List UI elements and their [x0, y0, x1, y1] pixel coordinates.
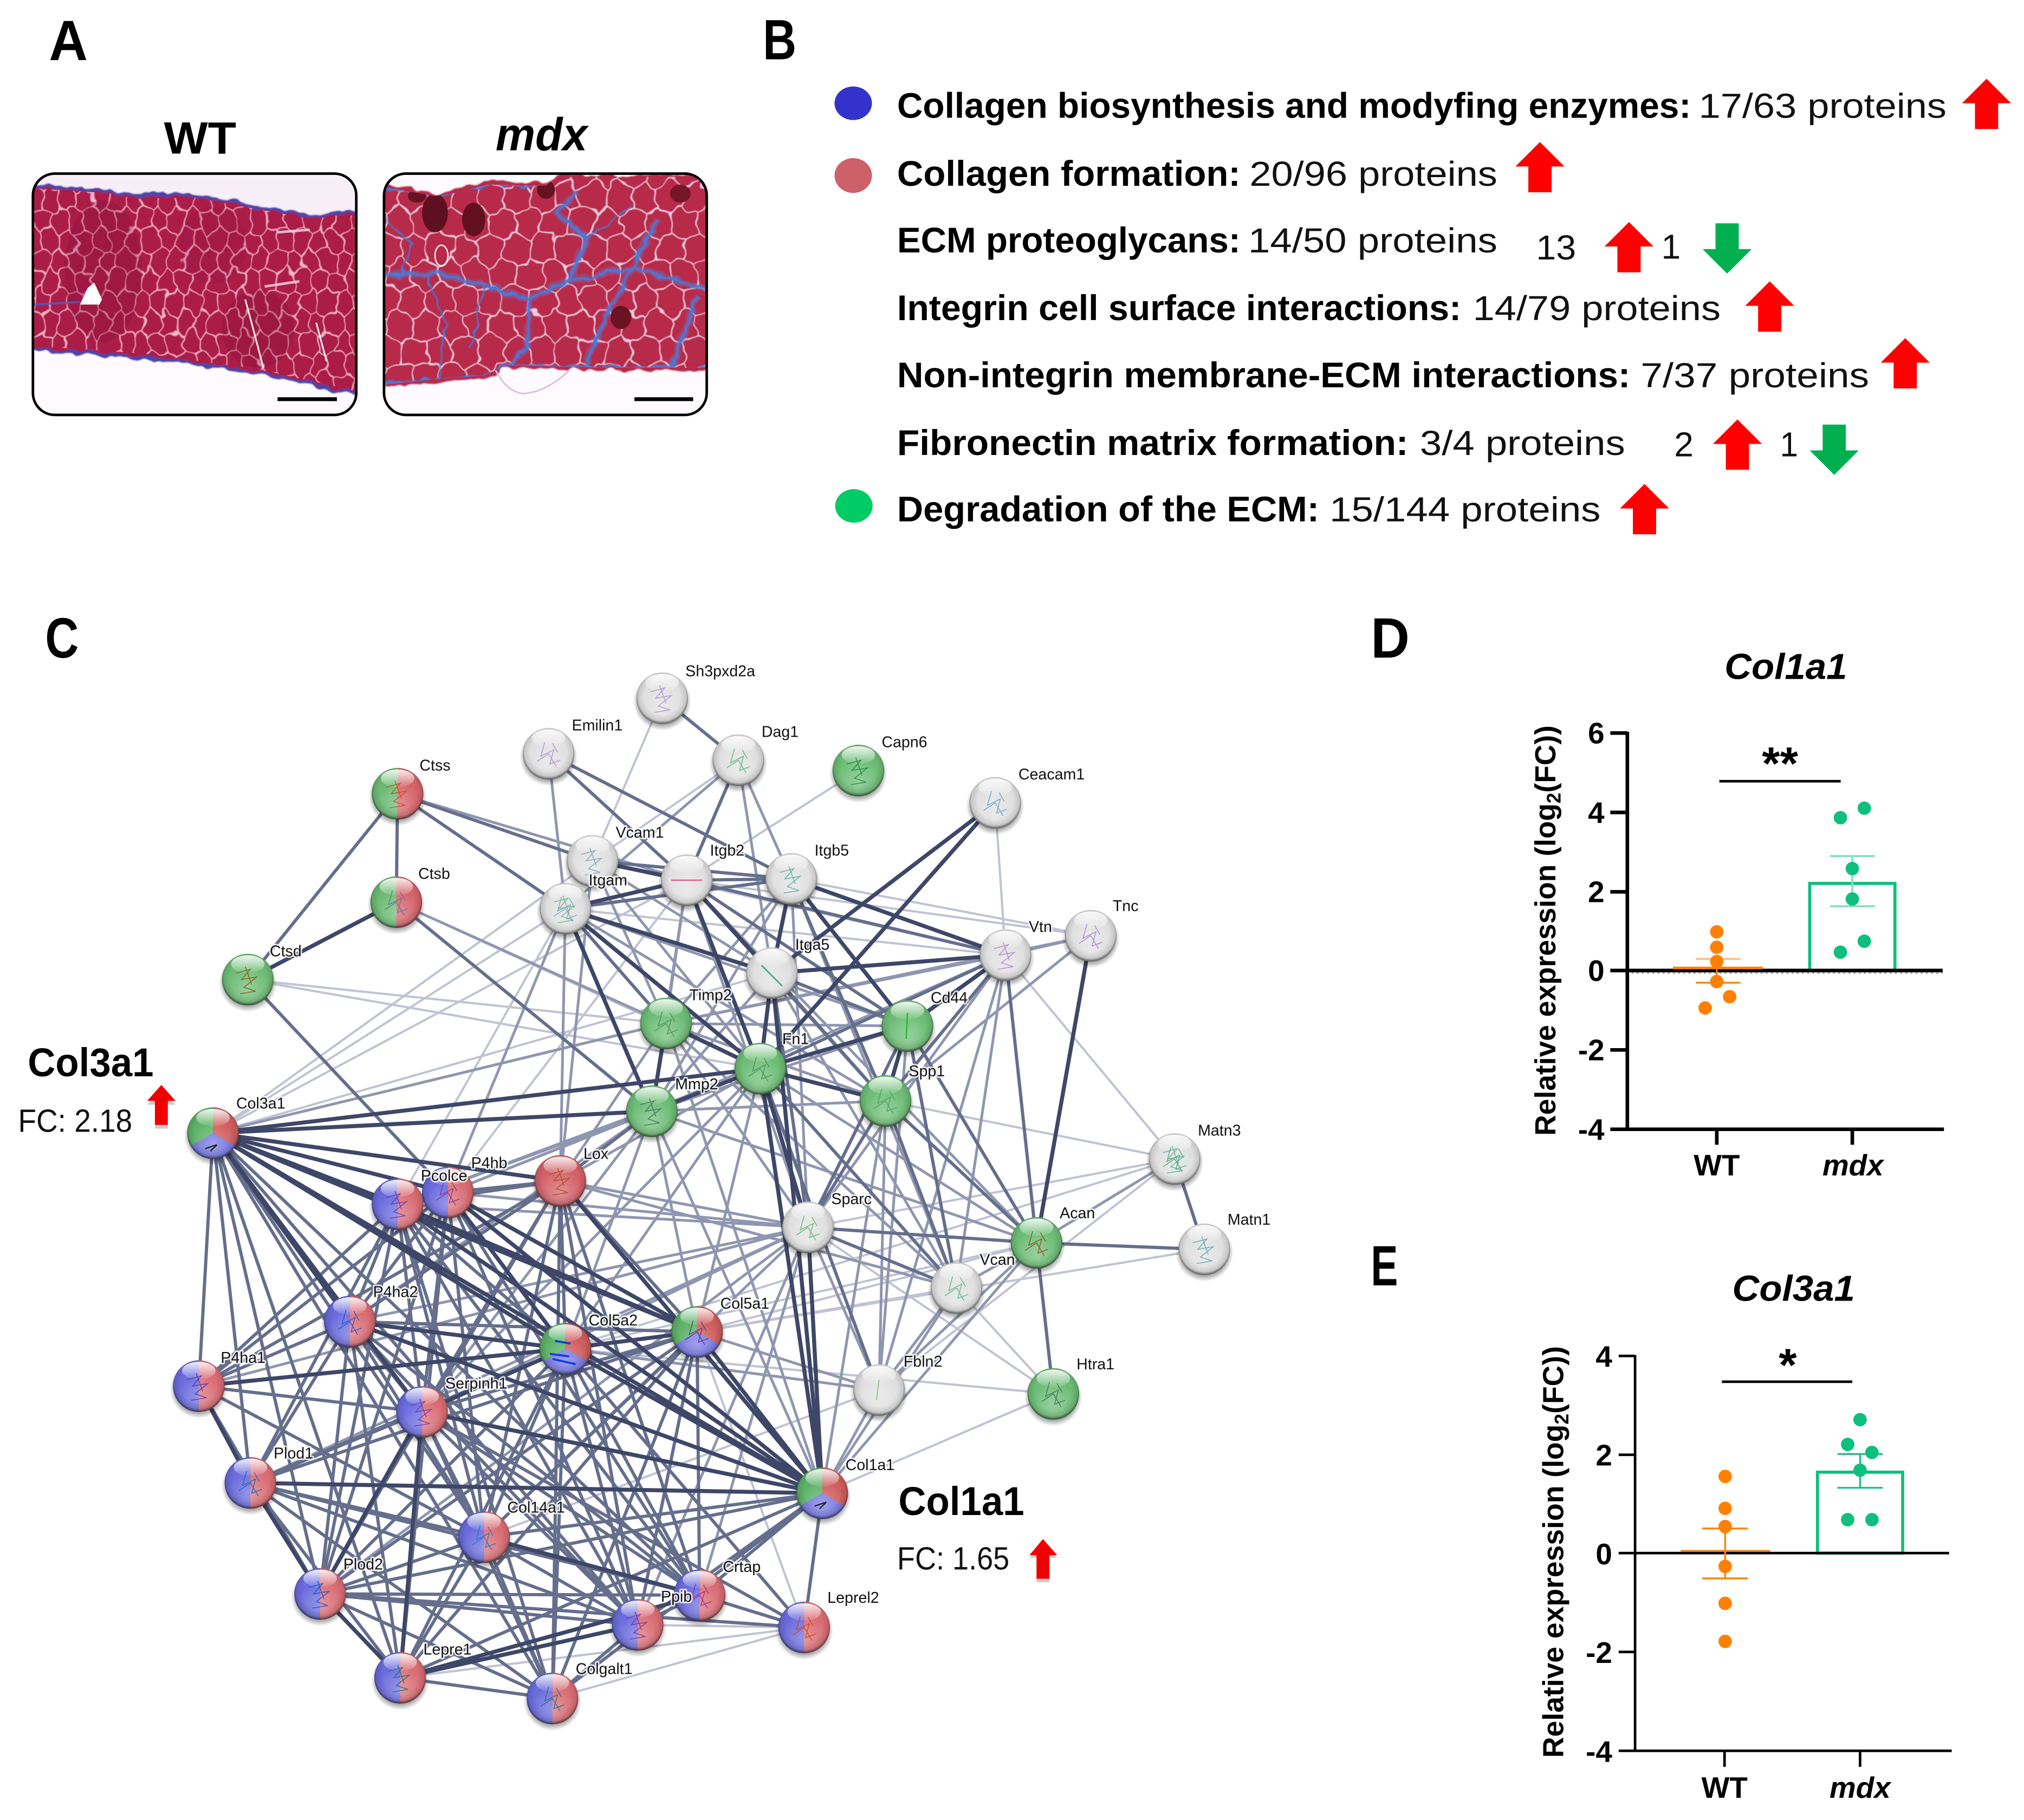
- row: non-integrin interactions: 7/37 proteins: [1640, 356, 1869, 395]
- y-axis title: 2: [1551, 1414, 1573, 1425]
- node Sparc: [779, 1191, 872, 1259]
- mdx bar: [1818, 1472, 1903, 1553]
- node Timp2: Timp2: [689, 987, 732, 1004]
- row: ECM proteoglycans: ECM proteoglycans:: [897, 220, 1241, 260]
- node P4hb: [368, 1154, 507, 1237]
- significance bar: [1722, 1381, 1852, 1382]
- row: collagen biosynthesis: [897, 79, 2011, 129]
- mdx error bars: [1830, 856, 1875, 906]
- node Capn6: Capn6: [881, 734, 927, 751]
- node P4ha2: P4ha2: [373, 1284, 418, 1301]
- frame: mdx micrograph: [384, 173, 707, 415]
- micrograph: WT muscle section: [34, 175, 355, 396]
- row: ECM degradation: Degradation of the ECM:: [897, 490, 1319, 529]
- row: collagen formation: Collagen formation:: [897, 154, 1241, 193]
- WT mean and error: [1681, 1529, 1770, 1578]
- chart title: Col1a1: [1724, 647, 1847, 687]
- node Col14a1: Col14a1: [507, 1499, 565, 1516]
- x labels: [1694, 1148, 1885, 1182]
- node Emilin1: Emilin1: [572, 717, 622, 734]
- row: ECM degradation: 15/144 proteins: [1329, 490, 1600, 529]
- y tick labels: 2: [1588, 875, 1605, 908]
- legend dot: blue: [834, 87, 872, 120]
- node Crtap: Crtap: [723, 1558, 761, 1576]
- node Tnc: [1062, 898, 1138, 968]
- node Mmp2: Mmp2: [675, 1076, 718, 1093]
- node Vtn: [976, 918, 1052, 987]
- panel D: Col1a1 bar chart: [1371, 607, 1944, 1182]
- node Dag1: [709, 723, 799, 792]
- node Leprel2: [775, 1589, 879, 1660]
- x labels: mdx: [1822, 1148, 1885, 1182]
- panel letter D: D: [1371, 607, 1410, 670]
- row: fibronectin matrix: [897, 419, 1859, 475]
- node Pcolce: [419, 1167, 477, 1225]
- y tick labels: [1586, 1340, 1612, 1768]
- node Sh3pxd2a: [633, 663, 755, 731]
- panel letter E: E: [1371, 1234, 1398, 1298]
- y tick labels: -4: [1586, 1734, 1612, 1768]
- callout Col3a1: FC: 2.18: [18, 1103, 132, 1139]
- node Lox: [531, 1146, 608, 1213]
- callout Col1a1: FC: 1.65: [897, 1540, 1009, 1576]
- WT points: [1698, 925, 1736, 1015]
- y tick labels: 0: [1588, 954, 1605, 987]
- panel A: histology: [13, 9, 723, 415]
- row: non-integrin interactions: [897, 338, 1930, 395]
- panel letter C: C: [45, 607, 79, 670]
- row: integrin interactions: [897, 281, 1794, 332]
- node Col14a1: [455, 1499, 565, 1569]
- node Ppib: [608, 1588, 692, 1657]
- node Matn3: [1146, 1122, 1241, 1191]
- node Cd44: Cd44: [931, 989, 968, 1006]
- node Dag1: Dag1: [762, 723, 799, 740]
- node Vtn: Vtn: [1029, 918, 1052, 935]
- node Itgb5: [762, 842, 849, 911]
- node Itga5: [743, 937, 829, 1005]
- node Vcan: Vcan: [979, 1251, 1015, 1269]
- callout Col3a1: Col3a1: [28, 1040, 154, 1085]
- node Htra1: [1024, 1356, 1114, 1426]
- row: fibronectin matrix: Fibronectin matrix formation:: [897, 423, 1408, 463]
- node Matn1: Matn1: [1228, 1211, 1270, 1228]
- mdx bar: [1809, 883, 1895, 971]
- row: collagen biosynthesis: 17/63 proteins: [1699, 87, 1947, 126]
- node Plod1: [222, 1445, 313, 1515]
- node Emilin1: [520, 717, 622, 786]
- node Plod2: Plod2: [343, 1556, 383, 1573]
- node Ctsb: [367, 866, 450, 934]
- network edges: [199, 698, 1204, 1699]
- chart title: Col3a1: [1733, 1269, 1855, 1309]
- x labels: WT: [1694, 1148, 1740, 1182]
- axes and ticks: [1610, 732, 1944, 1145]
- node Ctsd: Ctsd: [270, 943, 302, 960]
- panel B: enriched pathway list: [763, 9, 2011, 534]
- node Serpinh1: Serpinh1: [445, 1375, 507, 1393]
- label WT: WT: [164, 113, 236, 164]
- y tick labels: [1578, 716, 1605, 1146]
- dotted baseline: [1626, 973, 1943, 974]
- node Ctss: Ctss: [419, 757, 451, 774]
- node Acan: Acan: [1060, 1205, 1095, 1222]
- node Crtap: [671, 1558, 761, 1628]
- y tick labels: 4: [1588, 796, 1605, 829]
- node Pcolce: Pcolce: [421, 1167, 468, 1185]
- WT points: [1718, 1470, 1732, 1648]
- node Matn1: [1175, 1211, 1270, 1282]
- node P4ha1: P4ha1: [220, 1349, 265, 1367]
- mdx points: [1841, 1413, 1879, 1526]
- y tick labels: -2: [1586, 1636, 1612, 1669]
- node Col5a1: [668, 1295, 769, 1364]
- panel C: protein interaction network: [18, 607, 1270, 1731]
- x labels: WT: [1702, 1771, 1748, 1804]
- y tick labels: 6: [1588, 716, 1605, 750]
- node Fbln2: [850, 1353, 942, 1422]
- node Timp2: [637, 987, 732, 1056]
- node Serpinh1: [393, 1375, 507, 1444]
- node P4hb: P4hb: [471, 1154, 507, 1172]
- node Plod1: Plod1: [274, 1445, 313, 1462]
- significance star: *: [1779, 1339, 1797, 1391]
- node Itgam: Itgam: [588, 872, 627, 889]
- callout Col1a1: Col1a1: [898, 1479, 1024, 1524]
- node Lepre1: Lepre1: [424, 1641, 472, 1659]
- node Col3a1: [184, 1095, 286, 1166]
- scale bar mdx: [634, 397, 693, 401]
- row: fibronectin matrix: 3/4 proteins: [1420, 424, 1625, 463]
- node Itgb2: [658, 842, 744, 913]
- node Acan: [1008, 1205, 1095, 1275]
- callout Col1a1: [897, 1479, 1057, 1582]
- node Col3a1: Col3a1: [236, 1095, 286, 1113]
- row: fibronectin matrix: 1: [1780, 425, 1798, 464]
- node Lepre1: [371, 1641, 472, 1710]
- row: ECM proteoglycans: 1: [1661, 227, 1681, 266]
- row: fibronectin matrix: 2: [1674, 425, 1694, 464]
- significance bar: [1720, 781, 1841, 782]
- y tick labels: -2: [1578, 1033, 1605, 1067]
- row: collagen formation: [897, 142, 1565, 193]
- node P4ha2: [321, 1284, 418, 1354]
- node Capn6: [829, 734, 927, 803]
- node Fbln2: Fbln2: [904, 1353, 942, 1370]
- node Ctss: [368, 757, 451, 826]
- node Ctsb: Ctsb: [418, 866, 450, 883]
- row: collagen formation: 20/96 proteins: [1249, 154, 1497, 193]
- panel E: Col3a1 bar chart: [1371, 1234, 1952, 1804]
- callout Col3a1: [18, 1040, 176, 1139]
- node Itga5: Itga5: [795, 937, 829, 954]
- panel letter A: A: [49, 9, 88, 73]
- row: integrin interactions: 14/79 proteins: [1473, 289, 1721, 328]
- x labels: mdx: [1830, 1771, 1892, 1804]
- node Cd44: [878, 989, 968, 1058]
- node Ceacam1: [966, 766, 1085, 835]
- node Plod2: [291, 1556, 383, 1626]
- node Mmp2: [623, 1076, 718, 1143]
- node Spp1: [857, 1063, 945, 1133]
- y-axis title: 2: [1543, 792, 1565, 803]
- node Itgam: [536, 872, 627, 941]
- x labels: [1702, 1771, 1892, 1804]
- node Vcam1: Vcam1: [616, 824, 664, 841]
- mdx error bars: [1838, 1454, 1883, 1488]
- node Sh3pxd2a: Sh3pxd2a: [685, 663, 755, 680]
- node P4ha1: [170, 1349, 265, 1419]
- axes and ticks: [1619, 1355, 1952, 1767]
- node Matn3: Matn3: [1198, 1122, 1241, 1140]
- node Col5a1: Col5a1: [721, 1295, 769, 1312]
- node Fn1: Fn1: [782, 1031, 809, 1048]
- node Htra1: Htra1: [1076, 1356, 1114, 1373]
- node Colgalt1: [523, 1660, 633, 1731]
- node Vcam1: [563, 824, 664, 893]
- row: ECM proteoglycans: 14/50 proteins: [1248, 221, 1497, 260]
- panel letter B: B: [763, 9, 796, 72]
- scale bar WT: [277, 397, 337, 401]
- y-axis title: (FC)): [1537, 1346, 1569, 1414]
- node Fn1: [731, 1031, 809, 1101]
- row: ECM proteoglycans: [897, 220, 1751, 274]
- significance stars: **: [1762, 738, 1799, 790]
- node Ceacam1: Ceacam1: [1019, 766, 1085, 783]
- node Col1a1: [793, 1457, 894, 1525]
- node Itgb5: Itgb5: [814, 842, 849, 860]
- mdx points: [1834, 802, 1871, 959]
- node Col5a2: [536, 1312, 638, 1381]
- y-axis title: Relative expression (log: [1537, 1424, 1569, 1758]
- node Tnc: Tnc: [1113, 898, 1138, 915]
- legend dot: green: [835, 489, 873, 523]
- node Col1a1: Col1a1: [846, 1457, 894, 1474]
- node Col5a2: Col5a2: [588, 1312, 638, 1329]
- legend dot: red: [834, 158, 872, 193]
- node Itgb2: Itgb2: [710, 842, 744, 860]
- network nodes: [170, 663, 1270, 1731]
- node Ctsd: [219, 943, 302, 1012]
- y tick labels: 2: [1595, 1438, 1612, 1472]
- node Sparc: Sparc: [831, 1191, 872, 1208]
- row: non-integrin interactions: Non-integrin membrane-ECM interactions:: [897, 355, 1630, 395]
- y-axis title: Relative expression (log: [1529, 802, 1562, 1136]
- y tick labels: -4: [1578, 1113, 1605, 1146]
- node Vcan: [927, 1251, 1015, 1320]
- row: integrin interactions: Integrin cell surface interactions:: [897, 288, 1461, 328]
- row: ECM proteoglycans: 13: [1536, 228, 1576, 267]
- node Lox: Lox: [583, 1146, 608, 1163]
- y tick labels: 0: [1595, 1537, 1612, 1571]
- label mdx: mdx: [496, 109, 589, 161]
- row: ECM degradation: [897, 484, 1669, 534]
- node Spp1: Spp1: [909, 1063, 945, 1080]
- frame: WT micrograph: [33, 173, 356, 415]
- node Colgalt1: Colgalt1: [576, 1660, 633, 1678]
- node Leprel2: Leprel2: [827, 1589, 879, 1607]
- micrograph: mdx muscle section: [385, 174, 705, 394]
- y tick labels: 4: [1595, 1340, 1612, 1373]
- y-axis title: (FC)): [1529, 725, 1562, 792]
- WT mean and error: [1673, 959, 1763, 983]
- node Ppib: Ppib: [661, 1588, 692, 1606]
- row: collagen biosynthesis: Collagen biosynthesis and modyfing enzymes:: [897, 86, 1691, 126]
